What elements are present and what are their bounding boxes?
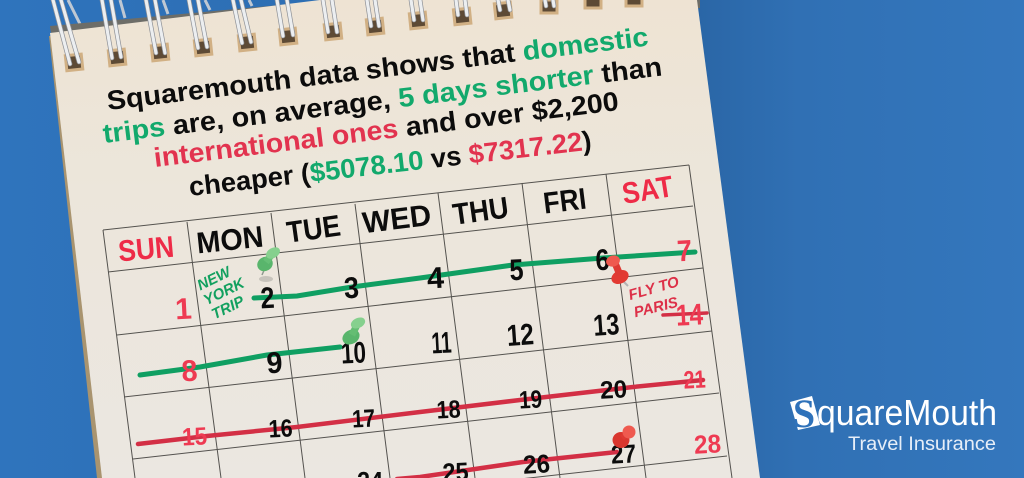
calendar grid bbox=[103, 165, 732, 478]
weekday headers bbox=[117, 170, 675, 268]
heading text bbox=[101, 22, 664, 202]
handwritten note: New York trip: NEW bbox=[195, 263, 235, 294]
weekday headers: TUE bbox=[285, 209, 343, 250]
calendar dates: 3 bbox=[343, 272, 360, 305]
red pin, top bbox=[605, 254, 631, 287]
calendar dates: 7 bbox=[676, 235, 693, 268]
calendar dates: 20 bbox=[599, 375, 628, 405]
calendar dates: 1 bbox=[174, 293, 193, 326]
heading text: Squaremouth data shows that domestic bbox=[105, 22, 650, 116]
calendar dates: 18 bbox=[436, 395, 461, 425]
green pin, top bbox=[255, 245, 282, 282]
calendar dates: 11 bbox=[431, 327, 452, 361]
handwritten note: New York trip bbox=[195, 263, 248, 323]
logo wordmark: quareMouth bbox=[817, 392, 997, 433]
weekday headers: THU bbox=[451, 191, 511, 232]
logo mark: square with S: S bbox=[793, 391, 815, 436]
logo tagline: Travel Insurance bbox=[848, 434, 996, 455]
handwritten note: Fly to Paris bbox=[627, 273, 681, 321]
calendar dates: 27 bbox=[610, 438, 637, 470]
calendar dates: 9 bbox=[266, 347, 283, 380]
handwritten note: New York trip: TRIP bbox=[209, 292, 248, 323]
red pin, lower bbox=[612, 426, 636, 448]
calendar dates: 19 bbox=[518, 385, 543, 415]
weekday headers: MON bbox=[195, 221, 265, 260]
weekday headers: SUN bbox=[117, 231, 176, 268]
heading text: international ones and over $2,200 bbox=[152, 86, 620, 173]
spiral binding bbox=[53, 0, 642, 71]
calendar dates: 15 bbox=[181, 422, 208, 452]
calendar dates: 4 bbox=[426, 262, 445, 295]
weekday headers: FRI bbox=[541, 183, 588, 221]
notebook back pages bbox=[50, 0, 700, 40]
calendar dates: 8 bbox=[181, 355, 198, 388]
calendar dates: 5 bbox=[509, 254, 524, 287]
heading text: cheaper ($5078.10 vs $7317.22) bbox=[187, 126, 593, 202]
heading text: trips are, on average, 5 days shorter than bbox=[101, 52, 664, 149]
calendar dates: 28 bbox=[693, 428, 722, 460]
logo: SquareMouth Travel Insurance bbox=[790, 391, 997, 455]
notebook page bbox=[50, 0, 760, 478]
weekday headers: WED bbox=[361, 199, 433, 240]
notebook side edge bbox=[49, 36, 106, 478]
handwritten note: New York trip: YORK bbox=[201, 274, 248, 309]
red trip lines bbox=[138, 313, 707, 478]
green trip lines bbox=[140, 252, 695, 375]
calendar dates: 14 bbox=[675, 298, 704, 333]
calendar dates: 21 bbox=[683, 365, 706, 395]
calendar dates: 12 bbox=[506, 318, 535, 353]
calendar dates: 13 bbox=[592, 308, 620, 343]
calendar dates: 2 bbox=[260, 282, 275, 315]
back wires of spiral binding bbox=[68, 0, 252, 24]
green pin, lower bbox=[340, 315, 367, 348]
calendar dates: 10 bbox=[340, 336, 367, 371]
handwritten note: Fly to Paris: FLY TO bbox=[627, 273, 681, 304]
calendar dates: 17 bbox=[351, 404, 376, 434]
calendar dates: 6 bbox=[595, 244, 610, 277]
weekday headers: SAT bbox=[620, 170, 675, 211]
calendar dates: 16 bbox=[268, 414, 293, 444]
calendar dates bbox=[174, 235, 722, 478]
handwritten note: Fly to Paris: PARIS bbox=[632, 294, 680, 321]
